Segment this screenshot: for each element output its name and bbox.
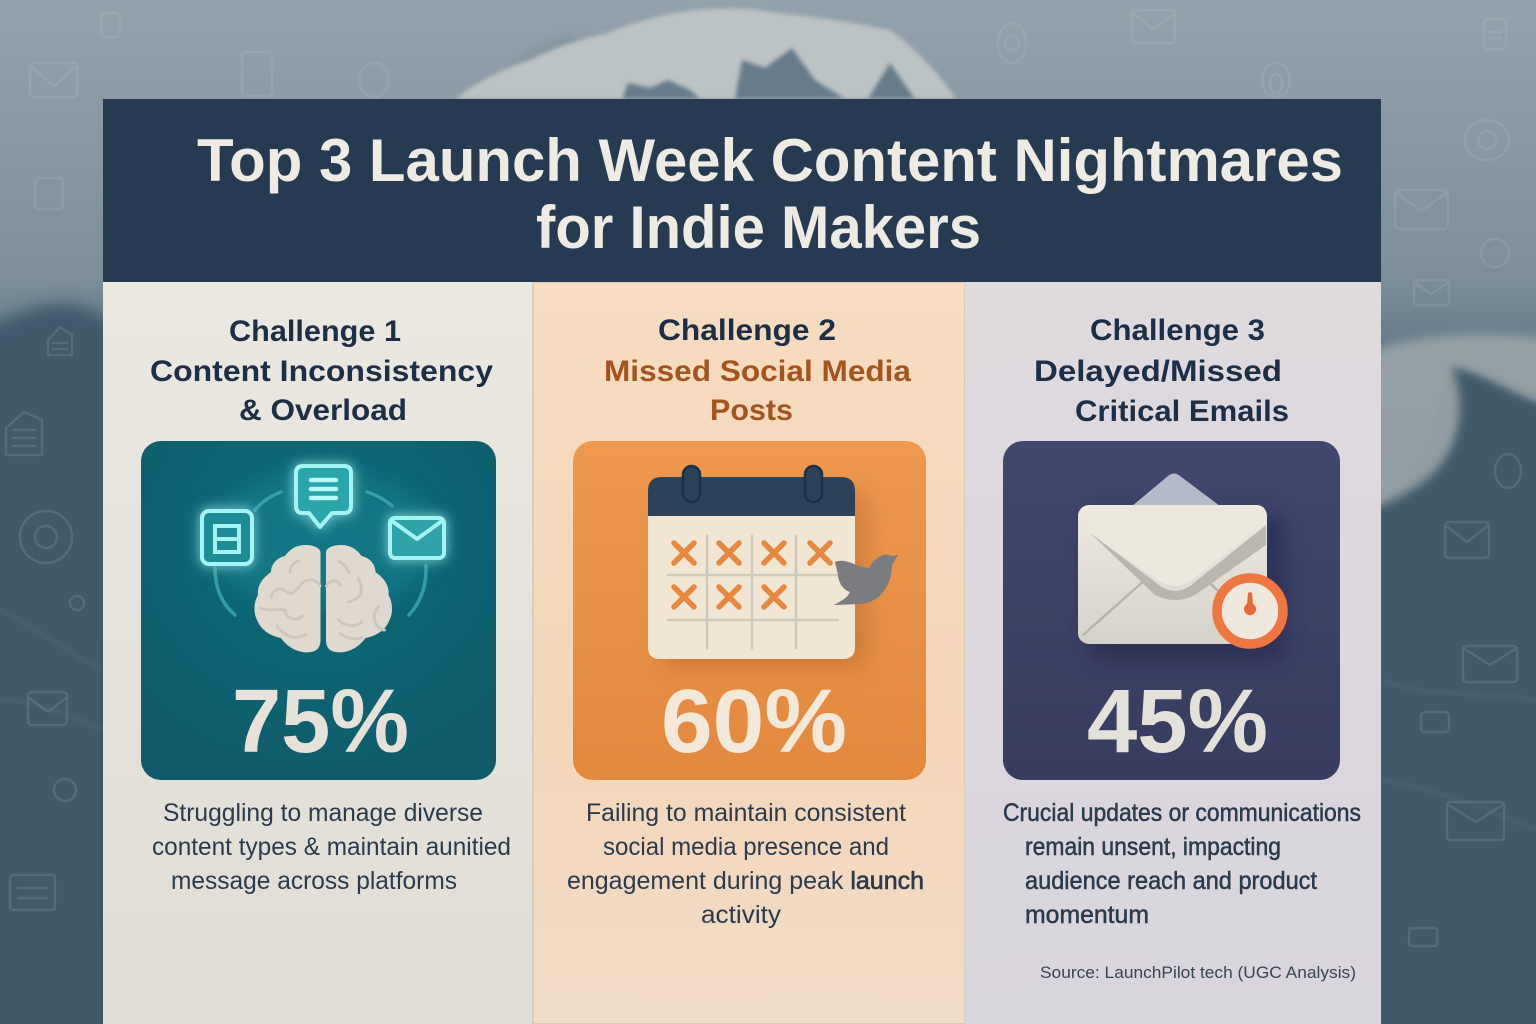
panel: challenge 2 column [533, 282, 965, 1024]
missed-day crosses [674, 543, 830, 607]
calendar grid [668, 536, 838, 648]
heading: challenge 2: Posts [710, 394, 793, 427]
heading: challenge 3: Critical Emails [1075, 395, 1289, 428]
heading: challenge 2: Missed Social Media [604, 355, 911, 388]
text: challenge 3 description: audience reach and product [1025, 867, 1317, 895]
text: challenge 2 description: activity [701, 901, 782, 929]
text: challenge 2 description: Failing to maintain consistent [586, 799, 906, 827]
text: challenge 2 description: engagement during peak launch [567, 867, 924, 895]
text: challenge 3 description: momentum [1025, 901, 1149, 929]
stat: 75%: 75% [232, 672, 409, 772]
icon: brain with content types [202, 466, 444, 652]
icon: clock [1217, 578, 1283, 644]
icon: bird [834, 555, 898, 605]
text: challenge 1 description: content types & maintain aunitied [152, 833, 511, 861]
text: challenge 2 description: social media presence and [603, 833, 889, 861]
icon: envelope with clock [1078, 474, 1285, 660]
heading: challenge 3: Delayed/Missed [1034, 355, 1282, 388]
icon: document [202, 511, 252, 564]
icon: brain [254, 545, 392, 652]
main panel [103, 99, 1381, 1024]
heading: challenge 3: Challenge 3 [1090, 314, 1265, 347]
panel: challenge 1 column [103, 282, 533, 1024]
text: challenge 3 description: remain unsent, impacting [1025, 833, 1281, 861]
card: 60% missed posts [573, 441, 926, 780]
source note: Source: LaunchPilot tech (UGC Analysis) [1040, 963, 1356, 982]
title banner [103, 99, 1381, 282]
stat: 45%: 45% [1087, 672, 1268, 772]
card: 45% delayed emails [1003, 441, 1340, 780]
icon: calendar with missed days [648, 466, 898, 670]
panel: challenge 3 column [965, 282, 1381, 1024]
text: challenge 1 description [152, 799, 511, 895]
stat: 60%: 60% [661, 672, 847, 772]
icon: envelope [390, 518, 444, 558]
title banner: Top 3 Launch Week Content Nightmares [197, 127, 1343, 194]
heading: challenge 2 [604, 314, 911, 427]
heading: challenge 2: Challenge 2 [658, 314, 836, 347]
text: challenge 1 description: message across platforms [171, 867, 457, 895]
heading: challenge 1: Challenge 1 [229, 315, 401, 348]
text: challenge 3 description: Crucial updates or communications [1003, 799, 1361, 827]
heading: challenge 1: Content Inconsistency [150, 355, 493, 388]
heading: challenge 3 [1034, 314, 1289, 428]
text: challenge 2 description [567, 799, 924, 929]
text: challenge 1 description: Struggling to manage diverse [163, 799, 483, 827]
icon: chat bubble [296, 466, 351, 527]
heading: challenge 1: & Overload [239, 394, 407, 427]
text: challenge 3 description [1003, 799, 1361, 929]
card: 75% content overload [141, 441, 496, 780]
title banner: for Indie Makers [536, 194, 981, 261]
heading: challenge 1 [150, 315, 493, 427]
